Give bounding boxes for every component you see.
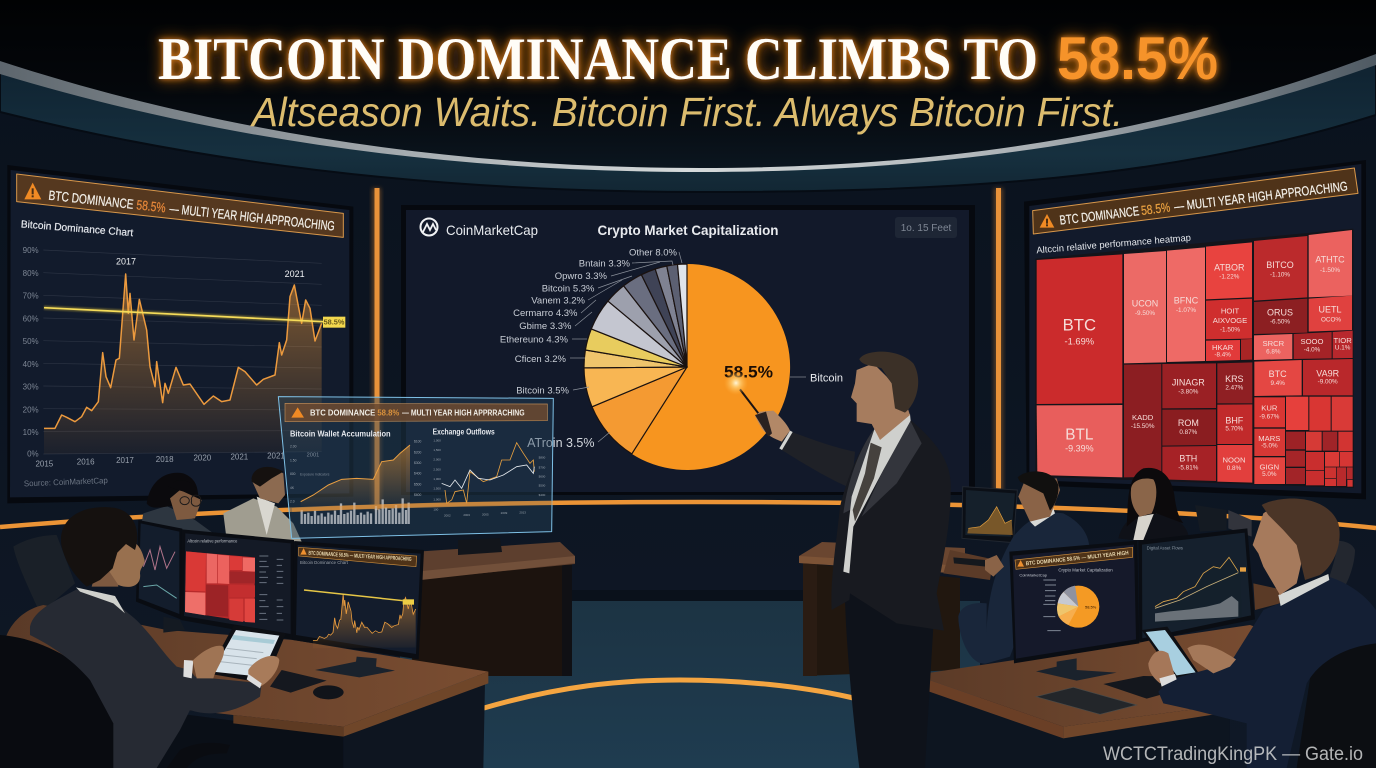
heatmap labels: 9.4%	[1270, 380, 1285, 387]
right chair	[1328, 541, 1355, 591]
wallet accumulation chart: 2.00	[290, 444, 297, 448]
left empty chair	[13, 535, 75, 613]
hand and pointer	[740, 389, 793, 450]
heatmap labels: 2.47%	[1225, 385, 1244, 392]
right alert banner: 58.5%	[1140, 200, 1171, 218]
monitor: mini dominance chart: Bitcoin Dominance Chart	[300, 560, 349, 565]
far left desk	[412, 538, 575, 676]
back person: right woman	[1118, 468, 1188, 542]
heatmap labels: VA9R	[1316, 368, 1340, 378]
heatmap labels: BTC	[1269, 369, 1287, 379]
left wall strip seen through glass	[292, 503, 553, 510]
wallet accumulation chart: $500	[414, 482, 422, 486]
pie labels: Cficen 3.2%	[515, 354, 567, 365]
notebook	[1036, 687, 1137, 714]
monitor: mini heatmap	[181, 529, 294, 640]
exchange outflows chart: 2013	[519, 510, 526, 514]
dominance chart axes and grid: 2018	[156, 455, 174, 464]
yellow resistance line and label	[44, 308, 345, 328]
yellow resistance line and label: 58.5%	[324, 318, 345, 327]
presenter	[740, 352, 951, 768]
wallet accumulation chart: $200	[414, 450, 422, 454]
pointing arm	[782, 431, 855, 488]
monitor: mini pie: Crypto Market Capitalization	[1058, 567, 1113, 572]
dominance chart axes and grid: 90%	[23, 246, 39, 255]
heatmap labels: -9.50%	[1135, 310, 1155, 317]
monitor: mini dominance chart: BTC DOMINANCE 58.5% — MULTI YEAR HIGH APPROACHING	[308, 551, 412, 563]
left chart title: Bitcoin Dominance Chart	[20, 219, 134, 239]
wallet accumulation chart: 1.50	[290, 458, 297, 462]
mouse	[313, 685, 344, 699]
heatmap labels: KRS	[1225, 374, 1244, 384]
wallet accumulation chart: 2001	[307, 453, 319, 459]
wallet accumulation chart: $300	[414, 461, 422, 465]
pie labels: Cermarro 4.3%	[513, 308, 578, 319]
pie labels: Gbime 3.3%	[519, 321, 572, 332]
pie labels: Other 8.0%	[629, 248, 678, 258]
exchange outflows chart: $400	[539, 493, 546, 497]
heatmap labels: OCO%	[1321, 316, 1341, 323]
heatmap labels: AIXVOGE	[1213, 316, 1247, 325]
heatmap labels: UETL	[1319, 305, 1341, 315]
wallet accumulation chart: 2.0	[290, 499, 295, 503]
ceiling blue soffit band	[0, 60, 1376, 192]
heatmap labels: -15.50%	[1131, 423, 1155, 430]
dominance chart axes and grid: 20%	[23, 405, 39, 414]
wallet accumulation chart: 800	[290, 472, 296, 476]
pointer spark on pie	[724, 371, 748, 395]
center floor	[400, 601, 980, 768]
left foreground man	[0, 507, 279, 768]
pie labels: Ethereuno 4.3%	[500, 334, 569, 346]
right foreground workstation	[915, 498, 1376, 768]
monitor: mini pie: CoinMarketCap	[1019, 573, 1048, 578]
right alert banner: BTC DOMINANCE	[1059, 203, 1140, 228]
right side empty chair backs	[1195, 505, 1252, 537]
dominance area and line	[44, 274, 322, 454]
exchange outflows chart: 2009	[501, 511, 508, 515]
left alert banner	[17, 174, 343, 237]
glass panel alert	[285, 403, 547, 422]
period button	[895, 217, 957, 238]
dominance chart axes and grid: 40%	[23, 360, 39, 369]
pie chart	[584, 264, 790, 470]
left alert banner: — MULTI YEAR HIGH APPROACHING	[169, 201, 335, 234]
period button: 1o. 15 Feet	[901, 223, 952, 234]
left desk top	[6, 605, 488, 727]
heatmap labels: -4.0%	[1304, 347, 1321, 354]
heatmap labels: 6.8%	[1266, 348, 1281, 355]
heatmap labels: -3.80%	[1178, 388, 1199, 395]
heatmap labels: 0.8%	[1227, 465, 1242, 472]
left foreground workstation	[0, 507, 488, 768]
coinmarketcap logo: CoinMarketCap	[446, 222, 538, 238]
wallet accumulation chart: Exposure Indicators	[300, 473, 330, 477]
heatmap labels: ATBOR	[1214, 262, 1245, 272]
right foreground man	[1148, 498, 1376, 768]
dominance chart axes and grid: 2016	[77, 458, 95, 467]
heatmap labels: BFNC	[1174, 296, 1199, 306]
right desk top	[915, 625, 1283, 727]
wallet accumulation chart	[290, 440, 422, 524]
coinmarketcap logo	[420, 218, 538, 238]
heatmap labels: -5.0%	[1261, 443, 1278, 450]
exchange outflows chart: 1,500	[433, 487, 441, 491]
left alert banner: BTC DOMINANCE	[48, 188, 134, 212]
heatmap labels: HOIT	[1221, 306, 1239, 315]
head	[851, 363, 910, 440]
exchange outflows chart: 2,500	[433, 467, 441, 471]
lapels	[843, 420, 922, 517]
pie labels: Bitcoin 3.5%	[516, 386, 570, 396]
bitcoin share value: 58.5%	[724, 362, 773, 382]
monitor: mini price chart	[1138, 528, 1255, 643]
dominance chart axes and grid: 2021	[267, 452, 285, 461]
bitcoin label: Bitcoin	[810, 372, 843, 384]
dominance chart axes and grid: 0%	[27, 450, 39, 459]
heatmap cells	[1035, 229, 1354, 488]
keyboard	[1103, 676, 1223, 699]
pie labels: Opwro 3.3%	[555, 271, 608, 282]
monitor: mini price chart: Digital Asset Flows	[1147, 545, 1183, 550]
left desk body	[343, 683, 485, 768]
back person: left woman with glasses	[140, 473, 213, 533]
wallet accumulation chart: 4K	[290, 486, 295, 490]
monitor: mini pie: 58.5%	[1085, 605, 1097, 610]
seated man desk	[943, 550, 993, 580]
far right desk	[799, 542, 965, 676]
heatmap labels: TIOR	[1334, 336, 1352, 345]
man suit	[30, 589, 262, 768]
hair	[859, 352, 918, 413]
heatmap labels: KADD	[1132, 413, 1154, 422]
title: 58.5%	[1057, 25, 1218, 92]
tie	[853, 443, 882, 522]
monitor: mini dominance chart	[293, 541, 424, 677]
heatmap labels: -1.50%	[1320, 267, 1340, 274]
trousers	[845, 583, 933, 768]
subtitle: Altseason Waits. Bitcoin First. Always Bitcoin First.	[249, 89, 1123, 135]
heatmap labels: -8.4%	[1214, 352, 1231, 359]
heatmap labels: -1.69%	[1065, 336, 1094, 346]
heatmap labels: -5.81%	[1178, 464, 1199, 471]
heatmap labels: SRCR	[1262, 339, 1285, 348]
heatmap labels: BTL	[1065, 426, 1094, 443]
glass panel alert: BTC DOMINANCE	[310, 407, 376, 417]
lower wall orange light strip	[0, 502, 1376, 528]
heatmap labels	[1063, 255, 1352, 478]
dominance chart axes and grid: 70%	[23, 292, 39, 301]
dominance chart axes and grid: 2017	[116, 456, 134, 465]
right desk body	[918, 687, 1230, 768]
heatmap labels: 0.87%	[1179, 429, 1198, 436]
heatmap labels: BHF	[1225, 415, 1244, 425]
heatmap labels: JINAGR	[1172, 377, 1205, 387]
exchange outflows chart: 2,000	[433, 458, 441, 462]
heatmap title: Altccin relative performance heatmap	[1036, 233, 1191, 255]
dominance chart axes and grid: 80%	[23, 269, 39, 278]
title: BITCOIN DOMINANCE CLIMBS TO	[158, 26, 1038, 92]
monitor: side small chart	[136, 520, 185, 633]
dominance chart axes and grid: 2020	[193, 454, 212, 463]
heatmap labels: -6.50%	[1270, 318, 1290, 325]
keyboard	[270, 670, 327, 693]
pie labels	[500, 248, 678, 396]
exchange outflows chart: 100	[433, 507, 439, 511]
heatmap labels: -1.10%	[1270, 271, 1290, 278]
jacket	[831, 419, 951, 631]
glass panel alert: 58.8%	[377, 407, 400, 417]
exchange outflows chart	[433, 438, 546, 518]
glass panel alert: — MULTI YEAR HIGH APPRRACHING	[402, 407, 525, 417]
ceiling light strip	[0, 54, 1376, 172]
heatmap labels: ORUS	[1267, 308, 1293, 318]
exchange outflows chart: $800	[539, 455, 546, 459]
shirt	[843, 414, 911, 573]
back person: right seated man with monitor	[943, 471, 1089, 664]
dominance chart axes and grid: 2021	[230, 453, 249, 462]
watermark: WCTCTradingKingPK — Gate.io	[1103, 744, 1363, 765]
foreground chair back	[0, 635, 115, 768]
chart source: Source: CoinMarketCap	[24, 475, 108, 488]
monitor: mini pie: BTC DOMINANCE 58.5% — MULTI YEAR HIGH	[1026, 551, 1129, 567]
dominance chart axes and grid	[23, 246, 322, 468]
exchange outflows chart: 2005	[482, 512, 489, 516]
heatmap labels: -1.07%	[1176, 307, 1196, 314]
heatmap labels: 5.70%	[1225, 426, 1244, 433]
back person: left woman in beige jacket	[223, 467, 302, 542]
exchange outflows chart: $700	[539, 465, 546, 469]
dominance chart axes and grid: 60%	[23, 314, 39, 323]
heatmap labels: U.1%	[1335, 345, 1351, 352]
heatmap labels: -9.00%	[1318, 379, 1338, 386]
monitor: mini heatmap: Altcoin relative performance	[187, 538, 238, 543]
exchange chart title: Exchange Outflows	[433, 428, 495, 437]
year labels on peaks: 2021	[285, 269, 305, 279]
pie leader lines	[570, 252, 806, 442]
seated man body	[958, 513, 1089, 664]
right alert banner	[1033, 168, 1358, 234]
heatmap labels: SOOO	[1301, 337, 1324, 346]
heatmap labels: -1.22%	[1219, 273, 1240, 280]
heatmap labels: ATHTC	[1315, 255, 1345, 265]
pie labels: Bitcoin 5.3%	[542, 284, 595, 294]
dominance chart axes and grid: 10%	[23, 428, 39, 437]
heatmap labels: NOON	[1223, 456, 1245, 465]
glass panel: wallet accumulation and outflows	[278, 397, 553, 538]
baseboard shadow	[400, 590, 820, 601]
heatmap labels: BTH	[1179, 453, 1197, 463]
year labels on peaks	[116, 257, 305, 279]
pillar light left	[372, 188, 381, 510]
exchange outflows chart: 1,000	[433, 477, 441, 481]
wallet accumulation chart: $400	[414, 472, 422, 476]
monitor: mini pie	[1009, 541, 1139, 681]
exchange outflows chart: 2002	[444, 514, 451, 518]
screen: left bitcoin dominance chart	[7, 165, 353, 503]
screen: center market cap pie	[401, 205, 975, 495]
pillar light right	[994, 188, 1003, 515]
heatmap labels: BTC	[1063, 316, 1096, 335]
heatmap labels: UCON	[1132, 299, 1158, 309]
wallet accumulation chart: $100	[414, 440, 422, 444]
year labels on peaks: 2017	[116, 257, 136, 267]
exchange outflows chart: 2003	[463, 513, 470, 517]
phone	[1142, 627, 1199, 678]
dominance chart axes and grid: 2015	[35, 459, 54, 468]
heatmap labels: 5.0%	[1262, 471, 1277, 478]
background sky above ceiling	[0, 0, 1376, 200]
wallet accumulation chart: $600	[414, 493, 422, 497]
wallet chart title: Bitcoin Wallet Accumulation	[290, 429, 391, 438]
exchange outflows chart: $600	[539, 475, 546, 479]
screen: right altcoin heatmap	[1024, 160, 1366, 499]
large pie label altcoin: ATroin 3.5%	[527, 436, 594, 450]
tablet	[207, 625, 286, 683]
exchange outflows chart: 1,000	[433, 498, 441, 502]
right desk far strip	[1253, 583, 1283, 610]
dominance chart axes and grid: 30%	[23, 383, 39, 392]
left alert banner: 58.5%	[136, 197, 167, 215]
exchange outflows chart: $500	[539, 484, 546, 488]
exchange outflows chart: 1,500	[433, 448, 441, 452]
pie title: Crypto Market Capitalization	[598, 222, 778, 238]
heatmap labels: -9.67%	[1259, 413, 1280, 420]
small monitor	[962, 487, 1017, 543]
heatmap labels: -9.39%	[1065, 444, 1094, 454]
floor orange ring	[484, 680, 925, 716]
heatmap labels: BITCO	[1266, 260, 1294, 270]
heatmap labels: KUR	[1261, 404, 1278, 413]
heatmap labels: HKAR	[1212, 343, 1234, 352]
pie labels: Bntain 3.3%	[579, 258, 631, 270]
heatmap labels: -1.50%	[1220, 326, 1240, 333]
heatmap labels: GIGN	[1260, 462, 1279, 471]
dominance chart axes and grid: 50%	[23, 337, 39, 346]
pie labels: Vanem 3.2%	[531, 296, 586, 306]
exchange outflows chart: 1,000	[433, 438, 441, 442]
heatmap labels: ROM	[1178, 418, 1199, 428]
heatmap labels: MARS	[1258, 434, 1280, 443]
